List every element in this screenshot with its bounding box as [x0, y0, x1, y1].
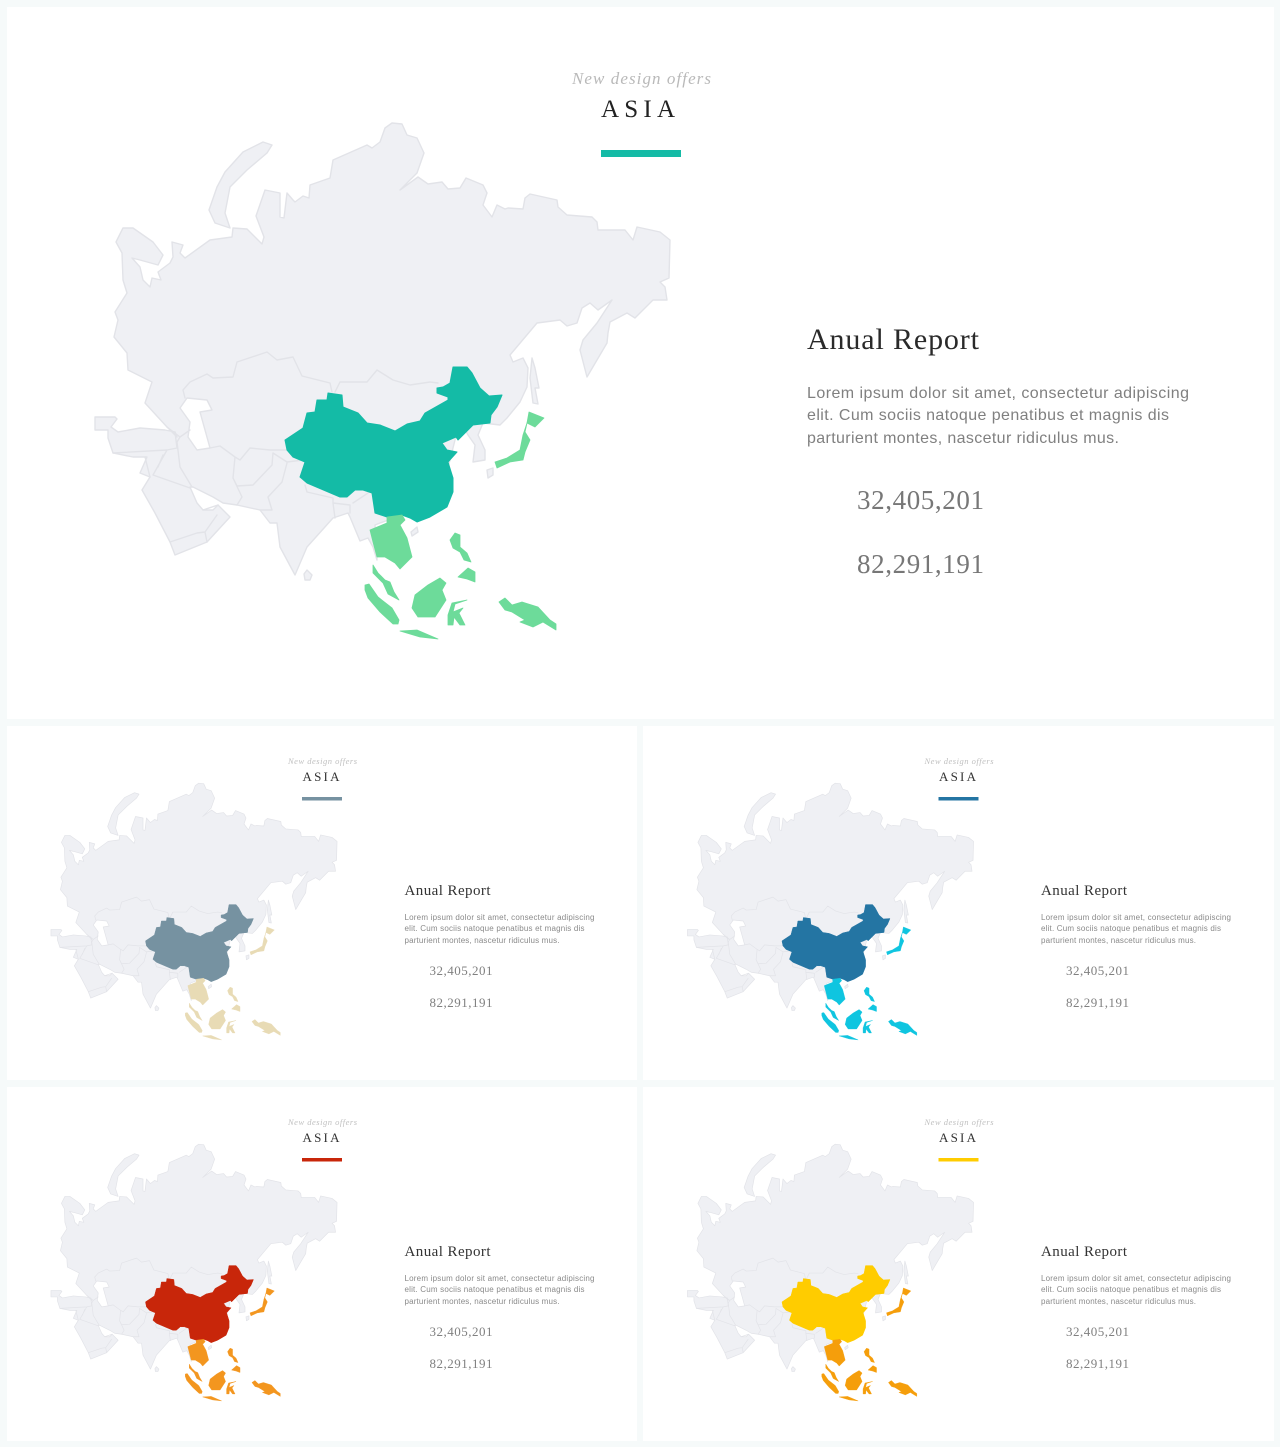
- body text: parturient montes, nascetur ridiculus mus.: [1041, 1297, 1196, 1306]
- map: Asia red: [51, 1144, 337, 1401]
- heading: Asia: ASIA: [939, 769, 977, 784]
- heading: Asia: ASIA: [302, 1130, 340, 1145]
- body text: elit. Cum sociis natoque penatibus et magnis dis: [404, 1285, 584, 1294]
- stat: second number: 82,291,191: [1066, 1356, 1129, 1371]
- eyebrow: New design offers: [924, 756, 994, 766]
- stat: first number: 32,405,201: [1066, 963, 1129, 978]
- body text: elit. Cum sociis natoque penatibus et magnis dis: [1041, 1285, 1221, 1294]
- heading: Asia: ASIA: [939, 1130, 977, 1145]
- accent bar: [302, 797, 342, 800]
- panel: main teal slide: [7, 7, 1274, 719]
- heading: annual report: Anual Report: [1041, 883, 1128, 899]
- heading: annual report: Anual Report: [807, 323, 980, 356]
- stat: second number: 82,291,191: [1066, 995, 1129, 1010]
- body text: [1041, 913, 1231, 945]
- body text: parturient montes, nascetur ridiculus mus.: [1041, 936, 1196, 945]
- body text: Lorem ipsum dolor sit amet, consectetur adipiscing: [1041, 913, 1231, 922]
- stat: second number: 82,291,191: [857, 549, 984, 579]
- panel: slate slide: [7, 726, 637, 1080]
- eyebrow: New design offers: [287, 1117, 358, 1127]
- map: Asia teal: [95, 123, 670, 639]
- body text: elit. Cum sociis natoque penatibus et magnis dis: [1041, 924, 1221, 933]
- heading: annual report: Anual Report: [404, 883, 491, 899]
- stat: second number: 82,291,191: [430, 1356, 492, 1371]
- body text: parturient montes, nascetur ridiculus mus.: [404, 1297, 560, 1306]
- body text: Lorem ipsum dolor sit amet, consectetur adipiscing: [1041, 1274, 1231, 1283]
- eyebrow: New design offers: [924, 1117, 994, 1127]
- body text: Lorem ipsum dolor sit amet, consectetur adipiscing: [404, 1274, 594, 1283]
- heading: annual report: Anual Report: [1041, 1244, 1128, 1260]
- body text: parturient montes, nascetur ridiculus mus.: [807, 430, 1119, 447]
- body text: elit. Cum sociis natoque penatibus et magnis dis: [404, 924, 584, 933]
- body text: Lorem ipsum dolor sit amet, consectetur adipiscing: [807, 385, 1189, 402]
- panel: yellow slide: [643, 1087, 1274, 1441]
- map: Asia yellow: [687, 1144, 974, 1401]
- heading: annual report: Anual Report: [404, 1244, 491, 1260]
- stat: first number: 32,405,201: [1066, 1324, 1129, 1339]
- map: Asia slate: [51, 783, 337, 1040]
- body text: [807, 385, 1189, 447]
- accent bar: [601, 150, 681, 157]
- body text: parturient montes, nascetur ridiculus mus.: [404, 936, 560, 945]
- stat: first number: 32,405,201: [430, 963, 492, 978]
- stat: second number: 82,291,191: [430, 995, 492, 1010]
- panel: blue slide: [643, 726, 1274, 1080]
- body text: [1041, 1274, 1231, 1306]
- heading: Asia: ASIA: [302, 769, 340, 784]
- panel: red slide: [7, 1087, 637, 1441]
- map: Asia blue: [687, 783, 974, 1040]
- accent bar: [302, 1158, 342, 1162]
- body text: Lorem ipsum dolor sit amet, consectetur adipiscing: [404, 913, 594, 922]
- stat: first number: 32,405,201: [857, 485, 984, 515]
- body text: [404, 1274, 594, 1306]
- eyebrow: new design offers: New design offers: [571, 69, 711, 88]
- accent bar: [938, 1158, 978, 1162]
- accent bar: [938, 797, 978, 800]
- heading: Asia: ASIA: [601, 96, 675, 123]
- stat: first number: 32,405,201: [430, 1324, 492, 1339]
- body text: elit. Cum sociis natoque penatibus et magnis dis: [807, 407, 1169, 424]
- eyebrow: New design offers: [287, 756, 358, 766]
- body text: [404, 913, 594, 945]
